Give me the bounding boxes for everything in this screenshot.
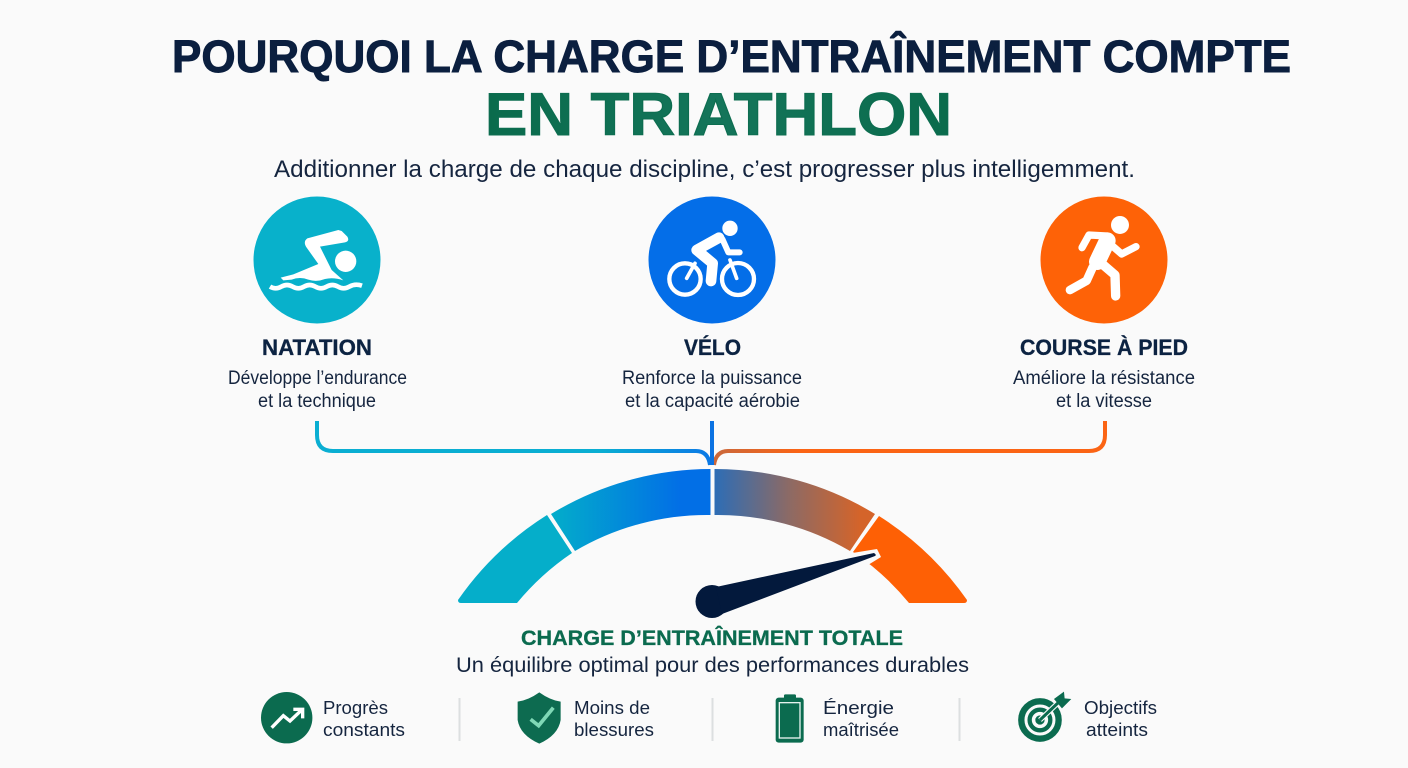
- gauge: [458, 469, 967, 618]
- title: EN TRIATHLON: [485, 81, 952, 148]
- connectors: [317, 421, 1105, 465]
- text: constants: [323, 720, 405, 740]
- title: POURQUOI LA CHARGE D’ENTRAÎNEMENT COMPTE: [172, 31, 1291, 82]
- gauge caption: [456, 626, 969, 677]
- panel: course a pied: [1013, 196, 1195, 412]
- text: [323, 698, 405, 740]
- heading: velo: VÉLO: [684, 335, 741, 360]
- text: [823, 698, 899, 740]
- text: course description: et la vitesse: [1056, 391, 1152, 412]
- icon: shield: [518, 692, 561, 744]
- benefit: objectifs atteints: [1021, 692, 1157, 740]
- benefit: moins de blessures: [518, 692, 654, 744]
- text: maîtrisée: [823, 720, 899, 740]
- needle: [696, 553, 876, 618]
- text: velo description: et la capacité aérobie: [625, 391, 800, 412]
- text: velo description: Renforce la puissance: [622, 368, 802, 389]
- text: natation description: Développe l’endurance: [228, 368, 407, 389]
- text: natation description: [228, 368, 407, 412]
- title: [172, 31, 1291, 148]
- text: velo description: [622, 368, 802, 412]
- icon: rising chart: [261, 692, 312, 743]
- needle notch: [850, 549, 881, 565]
- icon: runner: [1040, 196, 1168, 324]
- panel: natation: [228, 196, 407, 412]
- gauge segment: natation: [458, 515, 572, 603]
- gauge segment: mix: [714, 469, 875, 551]
- subtitle: Additionner la charge de chaque discipline, c’est progresser plus intelligemment.: [274, 156, 1135, 183]
- gauge caption: Un équilibre optimal pour des performances durables: [456, 654, 969, 677]
- text: blessures: [574, 720, 654, 740]
- benefit: energie maitrisee: [776, 694, 899, 743]
- text: Énergie: [823, 698, 894, 718]
- text: Progrès: [323, 698, 388, 718]
- panel: velo: [622, 196, 802, 412]
- icon: swimmer: [254, 196, 380, 324]
- gauge segment: course: [853, 516, 967, 603]
- gauge caption: CHARGE D’ENTRAÎNEMENT TOTALE: [521, 626, 903, 650]
- text: course description: [1013, 368, 1195, 412]
- icon: target: [1021, 692, 1071, 739]
- text: natation description: et la technique: [258, 391, 376, 412]
- text: [574, 698, 654, 740]
- text: Moins de: [574, 698, 650, 718]
- text: Objectifs: [1084, 698, 1157, 718]
- text: course description: Améliore la résistance: [1013, 368, 1195, 389]
- icon: battery: [776, 694, 804, 743]
- text: atteints: [1086, 720, 1148, 740]
- heading: course a pied: COURSE À PIED: [1020, 335, 1188, 360]
- gauge segment: velo: [551, 469, 710, 551]
- benefit: progres constants: [261, 692, 405, 743]
- icon: cyclist: [648, 196, 776, 324]
- heading: natation: NATATION: [262, 335, 372, 360]
- text: [1084, 698, 1157, 740]
